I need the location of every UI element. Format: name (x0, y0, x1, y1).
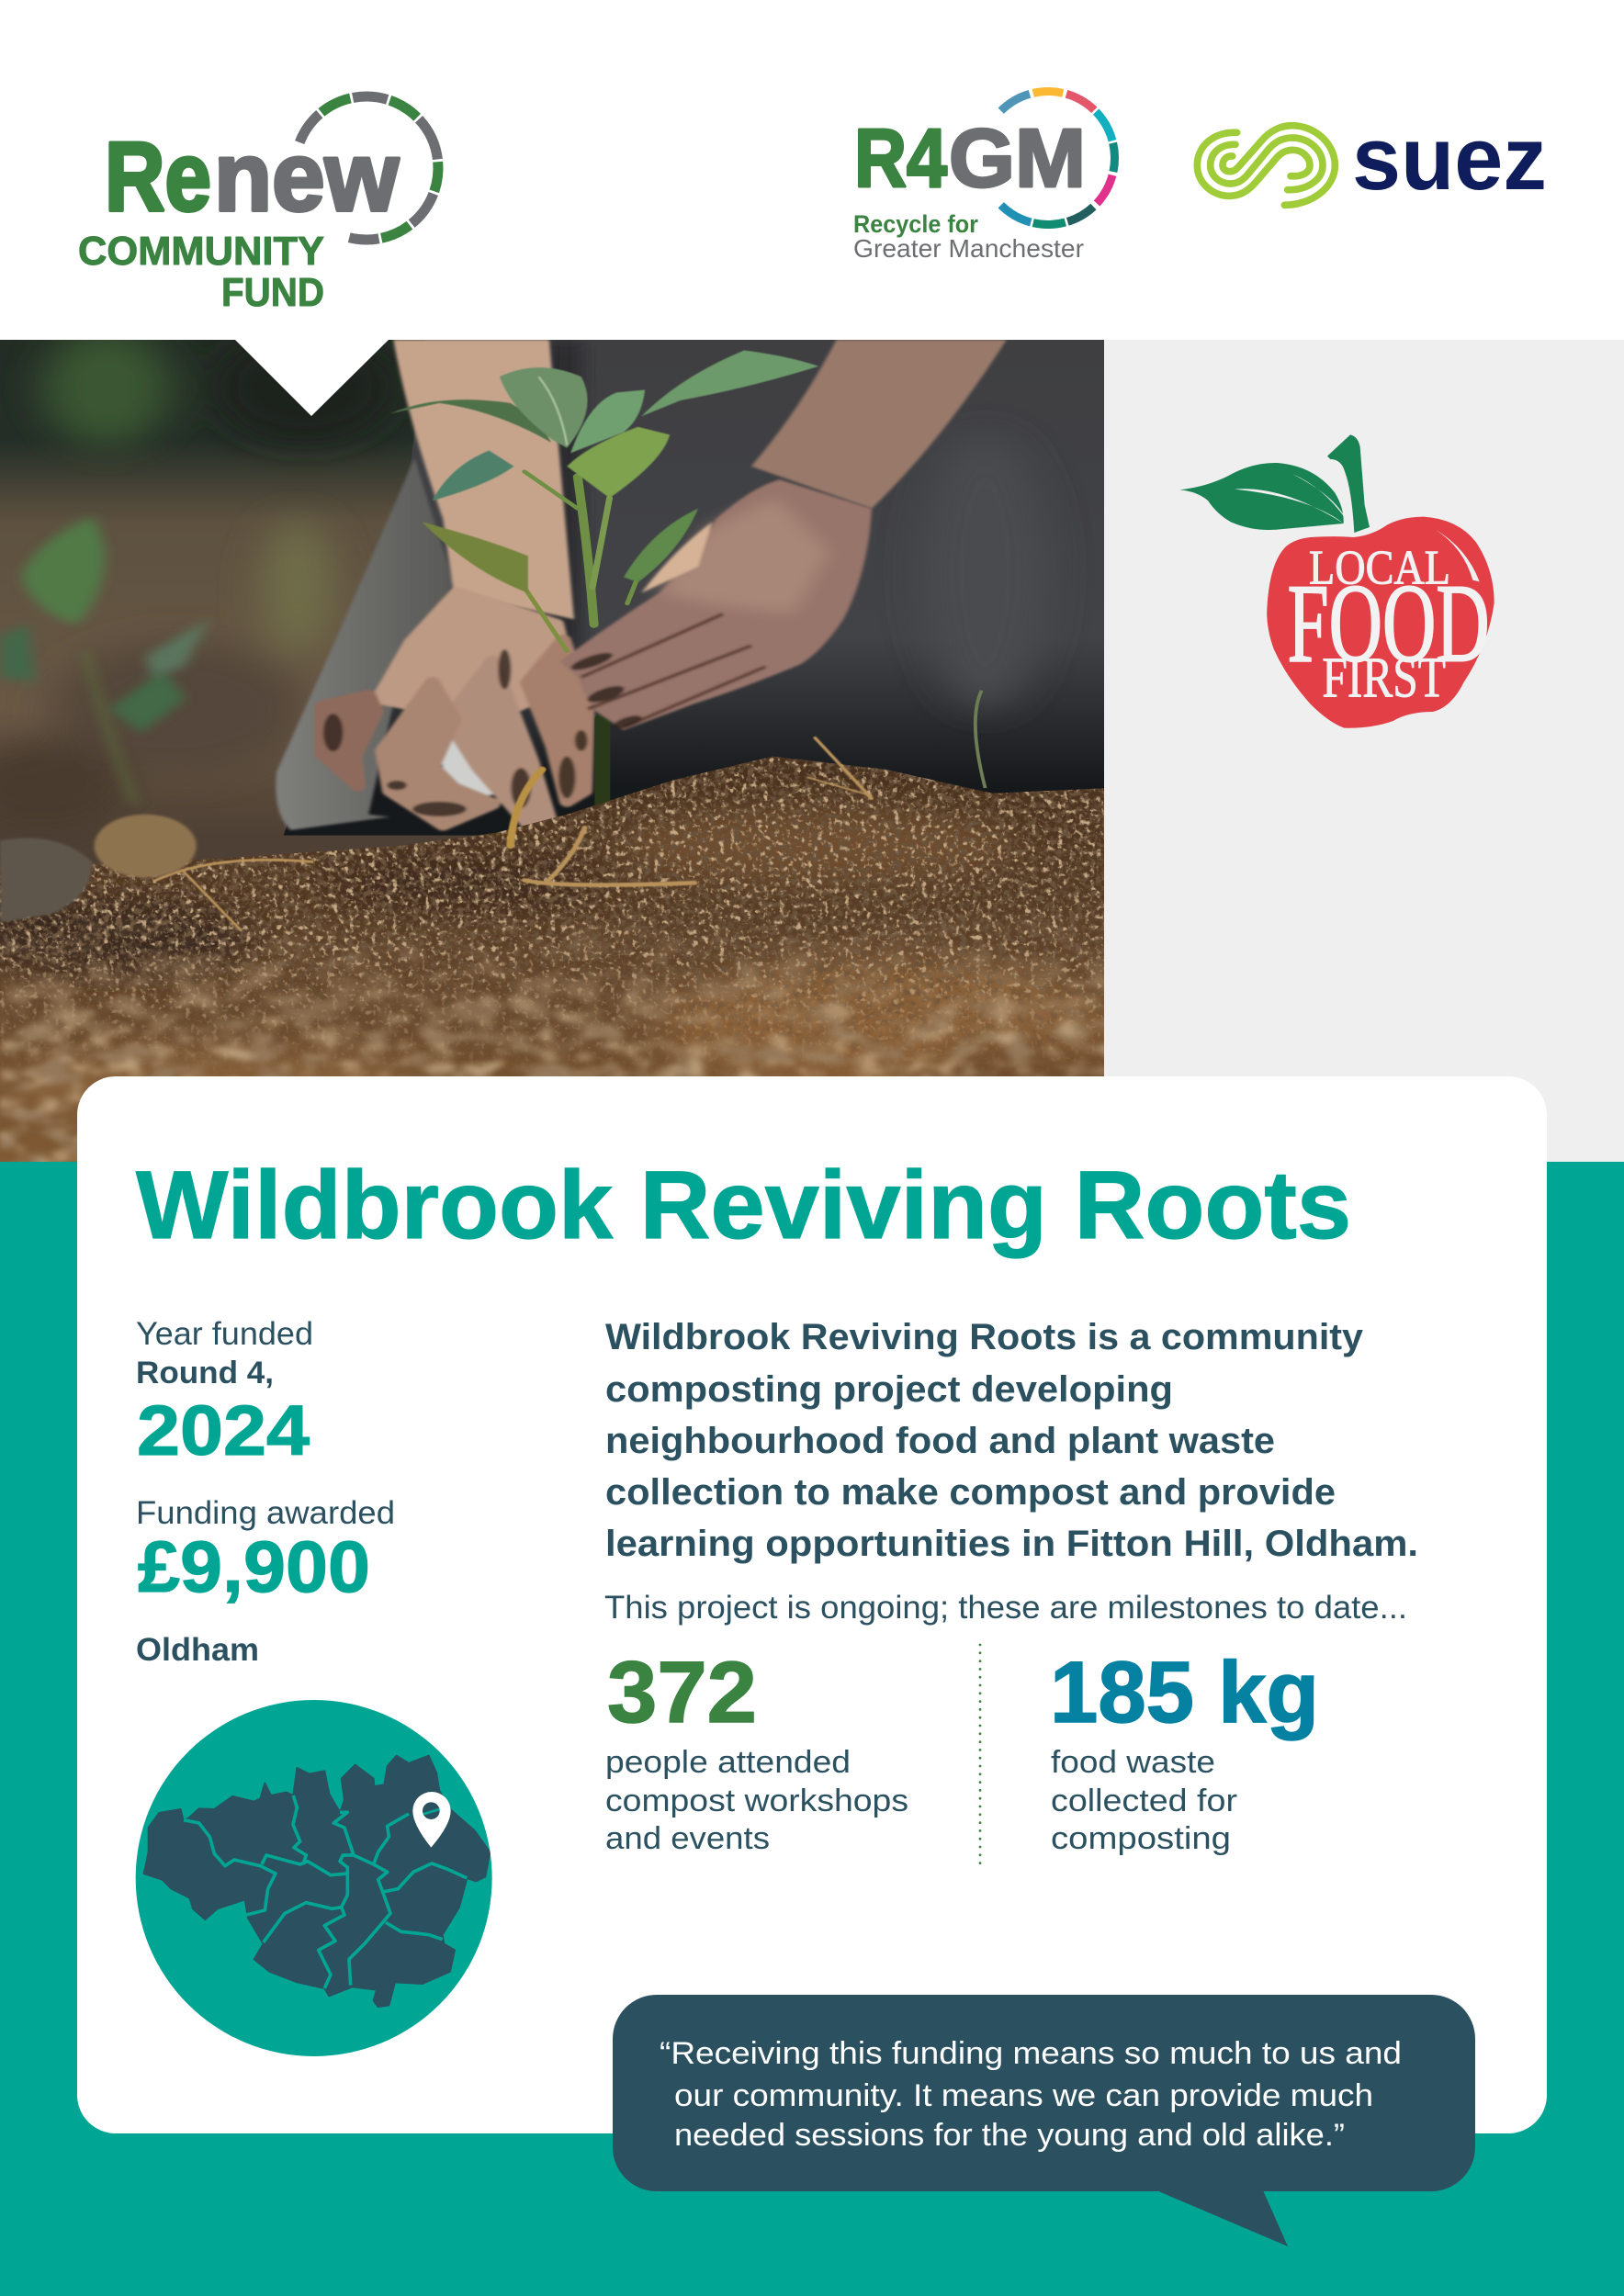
logo: Renew Community Fund (78, 67, 468, 315)
panel: main card (77, 1076, 1547, 2133)
project description: composting project developing (605, 1369, 1173, 1410)
stat: food waste: 185 kg (1050, 1644, 1319, 1741)
project description (605, 1317, 1418, 1564)
logo: R4GM Recycle for Greater Manchester: GM (949, 113, 1086, 205)
project description: neighbourhood food and plant waste (605, 1421, 1275, 1461)
logo: Renew Community Fund: Re (105, 121, 211, 231)
logo: R4GM Recycle for Greater Manchester: R4 (854, 113, 947, 205)
key facts column (136, 1316, 395, 1668)
stat: people attended (605, 1644, 908, 1856)
key facts column: Funding awarded (136, 1495, 395, 1531)
hand tool (0, 815, 197, 922)
teal band (0, 1162, 1624, 2296)
soil (0, 751, 1156, 1173)
panel: grey logo panel (1104, 340, 1624, 1162)
quote speech bubble: “Receiving this funding means so much to us and (660, 2036, 1402, 2071)
apple stem (1327, 434, 1370, 533)
title: Wildbrook Reviving Roots (136, 1152, 1351, 1259)
logo: R4GM Recycle for Greater Manchester (853, 63, 1143, 263)
left blurred seedling (0, 516, 209, 804)
logo: Renew Community Fund: FUND (221, 270, 324, 315)
apple leaf (1179, 463, 1344, 530)
stat: food waste (1050, 1644, 1319, 1856)
logo: Local Food First apple: FIRST (1322, 646, 1446, 710)
apron (284, 340, 1111, 836)
logo: Local Food First apple: FOOD (1288, 562, 1490, 685)
quote speech bubble: our community. It means we can provide much (674, 2078, 1373, 2113)
key facts column: Oldham (136, 1632, 259, 1668)
logo: SUEZ: suez (1352, 108, 1547, 208)
stat: people attended: and events (605, 1821, 770, 1856)
map of Greater Manchester with Oldham pin (136, 1700, 492, 2056)
milestones intro: This project is ongoing; these are milestones to date... (604, 1590, 1407, 1626)
stems (524, 472, 637, 815)
arms (393, 340, 574, 619)
quote speech bubble (613, 1995, 1475, 2246)
key facts column: Year funded (136, 1316, 313, 1352)
quote speech bubble: needed sessions for the young and old alike.” (674, 2118, 1345, 2153)
logo: R4GM Recycle for Greater Manchester: Greater Manchester (853, 234, 1084, 263)
logo: Renew Community Fund: new (214, 121, 400, 231)
stat: people attended: 372 (607, 1644, 757, 1741)
logo: Renew Community Fund: COMMUNITY (78, 229, 324, 274)
photo: hands planting a seedling in soil (0, 330, 1156, 1173)
lower hand (322, 593, 588, 827)
key facts column: 2024 (137, 1391, 310, 1470)
straw (156, 737, 872, 930)
key facts column: Round 4, (136, 1356, 274, 1390)
project description: learning opportunities in Fitton Hill, Oldham. (605, 1524, 1418, 1564)
logo: R4GM Recycle for Greater Manchester: Recycle for (853, 210, 978, 238)
upper hand (560, 479, 872, 731)
key facts column: £9,900 (138, 1525, 370, 1607)
logo: Local Food First apple (1179, 434, 1494, 728)
logo: Local Food First apple: LOCAL (1309, 539, 1450, 594)
logo: SUEZ (1197, 108, 1547, 208)
pointer under logo (235, 340, 389, 416)
stat: food waste: food waste (1051, 1745, 1215, 1780)
apple body (1267, 517, 1494, 728)
stat: food waste: collected for (1051, 1784, 1237, 1818)
location pin (412, 1792, 451, 1848)
leaves (389, 350, 818, 593)
stat: people attended: compost workshops (605, 1784, 908, 1818)
project description: Wildbrook Reviving Roots is a community (605, 1317, 1364, 1357)
stat: people attended: people attended (605, 1745, 851, 1780)
project description: collection to make compost and provide (605, 1472, 1336, 1513)
stat: food waste: composting (1051, 1821, 1231, 1856)
